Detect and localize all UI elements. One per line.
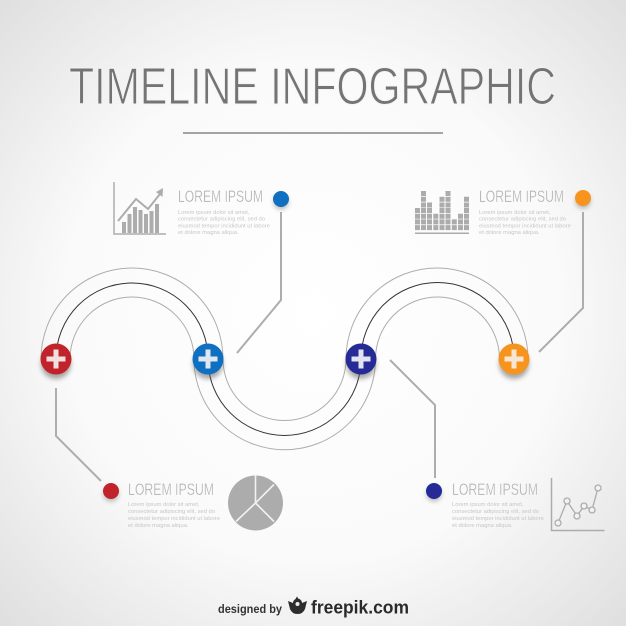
text block: eiusmod tempor incididunt ut labore (479, 223, 571, 229)
marker: orange (575, 190, 591, 208)
marker: red (103, 483, 119, 502)
text block: et dolore magna aliqua. (128, 523, 189, 529)
heading: LOREM IPSUM (128, 481, 214, 499)
connector: navy (390, 360, 435, 478)
icon: line chart (552, 478, 604, 530)
panel: top left (114, 182, 289, 236)
text block: et dolore magna aliqua. (452, 523, 513, 529)
timeline node: navy (346, 344, 376, 379)
footer credit: freepik.com (311, 596, 409, 618)
text block: Lorem ipsum dolor sit amet, (128, 502, 200, 508)
icon: freepik logo (288, 596, 307, 614)
panel: top right (415, 188, 591, 236)
footer credit: designed by (218, 602, 282, 616)
panel: bottom right (426, 478, 604, 530)
text block: eiusmod tempor incididunt ut labore (128, 516, 220, 522)
text block: et dolore magna aliqua. (479, 230, 540, 236)
text block: Lorem ipsum dolor sit amet, (452, 502, 524, 508)
marker: blue (273, 191, 289, 210)
icon: equalizer chart (415, 191, 469, 234)
heading: LOREM IPSUM (479, 188, 564, 206)
text block: eiusmod tempor incididunt ut labore (178, 223, 270, 229)
panel: bottom left (103, 475, 283, 530)
connector: orange (539, 212, 583, 352)
text block: consectetur adipiscing elit, sed do (128, 509, 215, 515)
text block: et dolore magna aliqua. (178, 230, 239, 236)
text block: Lorem ipsum dolor sit amet, (178, 210, 250, 216)
marker: navy (426, 483, 442, 502)
text block: eiusmod tempor incididunt ut labore (452, 516, 544, 522)
text block: consectetur adipiscing elit, sed do (452, 509, 539, 515)
text block: Lorem ipsum dolor sit amet, (479, 210, 551, 216)
text block: consectetur adipiscing elit, sed do (479, 217, 566, 223)
timeline node: orange (498, 344, 530, 379)
connector: red (56, 388, 101, 481)
text block: consectetur adipiscing elit, sed do (178, 217, 265, 223)
timeline node: blue (192, 344, 224, 379)
timeline wave track (41, 268, 528, 450)
icon: pie chart (228, 475, 283, 530)
connector: blue (237, 212, 281, 353)
heading: LOREM IPSUM (452, 481, 538, 499)
timeline node: red (40, 344, 72, 379)
footer credit (218, 596, 409, 618)
heading: LOREM IPSUM (178, 188, 263, 206)
icon: rising bar chart (114, 182, 166, 234)
